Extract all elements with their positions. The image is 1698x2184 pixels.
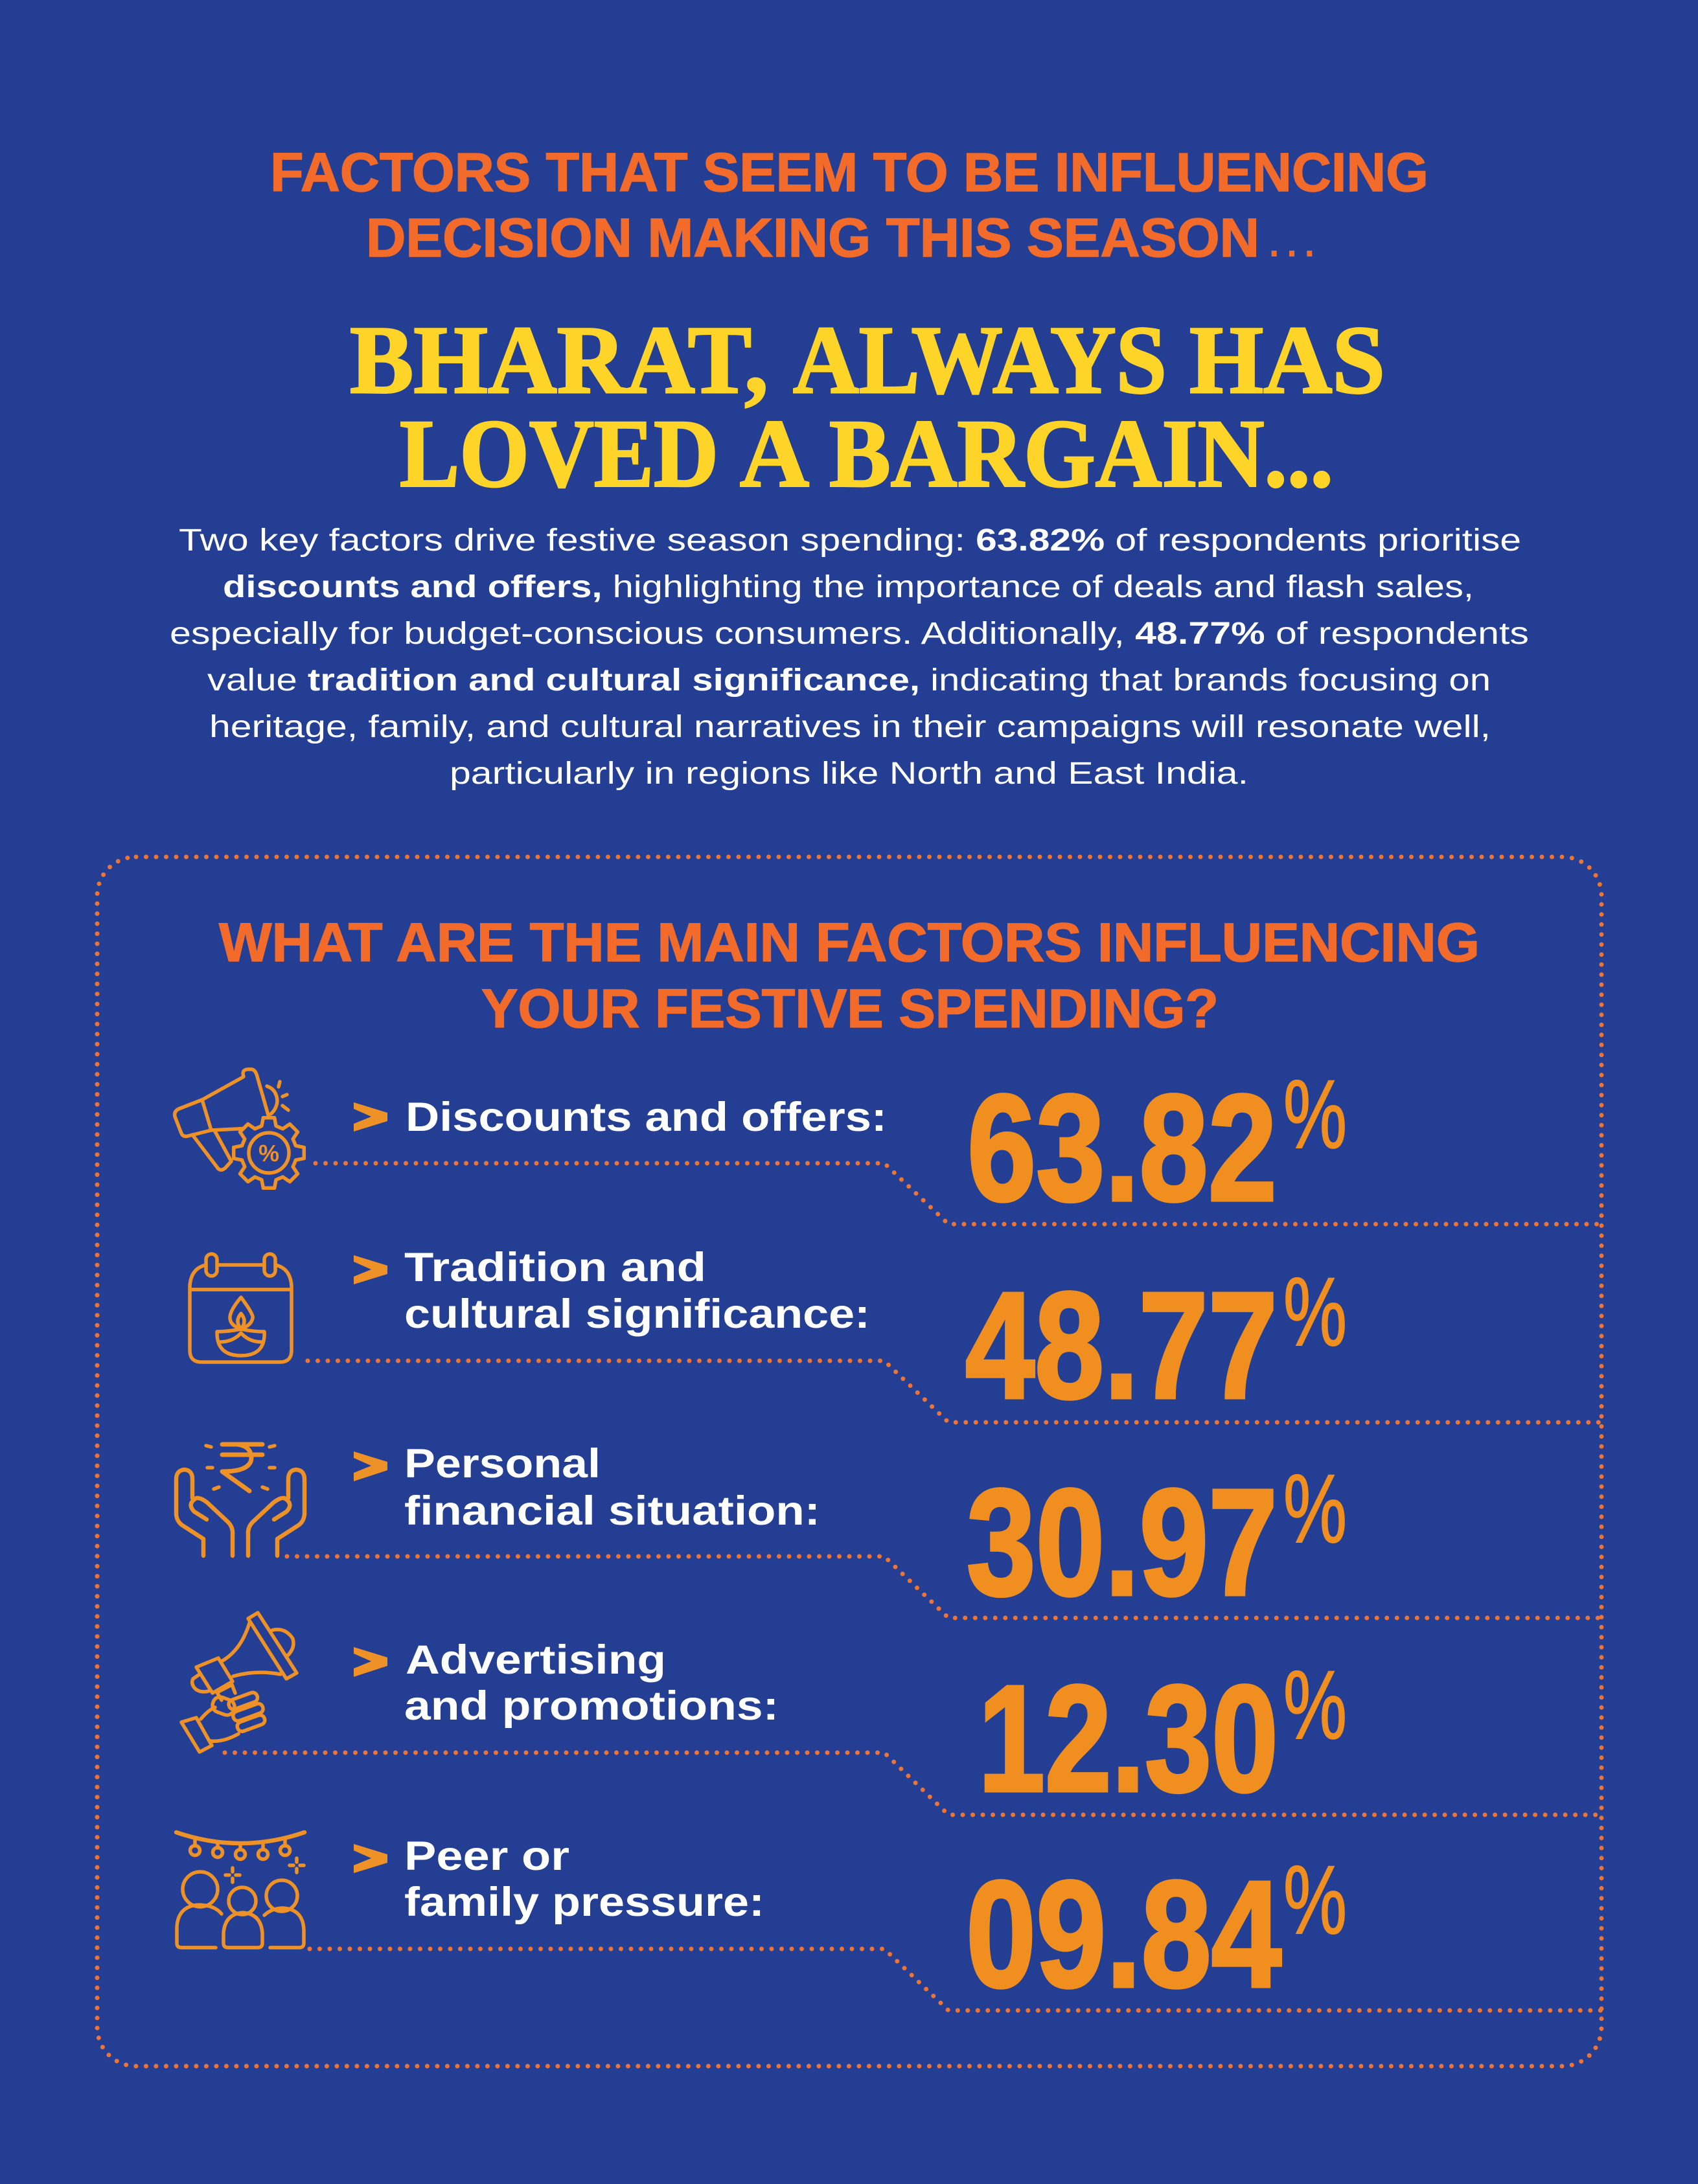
- value: %: [1283, 1454, 1347, 1563]
- connector line: [287, 1556, 1601, 1618]
- panel heading: YOUR FESTIVE SPENDING?: [481, 978, 1219, 1039]
- intro paragraph: particularly in regions like North and East India.: [450, 756, 1248, 791]
- label: [404, 1637, 779, 1729]
- heading: Bharat always has loved a bargain: LOVED: [400, 400, 718, 508]
- arrow: [354, 1647, 387, 1677]
- intro paragraph: Two key factors drive festive season spending: 63.82% of respondents prioritise: [179, 523, 1521, 558]
- label: Peer or: [404, 1834, 569, 1879]
- value: %: [1283, 1650, 1347, 1759]
- intro paragraph: value tradition and cultural significance, indicating that brands focusing on: [207, 663, 1491, 698]
- value: %: [1283, 1257, 1347, 1366]
- connector line: [308, 1361, 1601, 1422]
- icon: calendar with diya: [190, 1254, 292, 1362]
- value: 63.82: [967, 1063, 1277, 1233]
- label: [404, 1834, 764, 1925]
- icon: family under festive garland: [176, 1832, 304, 1948]
- dotted panel border: [97, 857, 1601, 2066]
- label: [404, 1245, 870, 1337]
- intro paragraph: discounts and offers, highlighting the importance of deals and flash sales,: [223, 570, 1474, 604]
- panel heading: WHAT ARE THE MAIN FACTORS INFLUENCING: [219, 912, 1480, 973]
- label: cultural significance:: [404, 1291, 870, 1337]
- label: family pressure:: [404, 1880, 764, 1925]
- arrow: [354, 1451, 387, 1481]
- heading: Bharat always has loved a bargain: BHARAT,: [350, 306, 768, 414]
- value: 48.77: [965, 1260, 1278, 1430]
- row: peer or family pressure: [176, 1832, 1601, 2019]
- intro paragraph: [170, 523, 1529, 791]
- heading: Bharat always has loved a bargain: HAS: [1189, 306, 1385, 414]
- label: Advertising: [406, 1637, 666, 1683]
- label: [404, 1441, 820, 1534]
- value: %: [1283, 1060, 1347, 1168]
- panel heading: [219, 912, 1480, 1039]
- title: factors influencing decision making: FACTORS THAT SEEM TO BE INFLUENCING: [270, 142, 1428, 203]
- label: financial situation:: [404, 1488, 820, 1534]
- intro paragraph: heritage, family, and cultural narratives in their campaigns will resonate well,: [209, 710, 1491, 744]
- intro paragraph: especially for budget-conscious consumers. Additionally, 48.77% of respondents: [170, 617, 1529, 651]
- arrow: [354, 1102, 387, 1132]
- row: personal financial situation: [176, 1441, 1601, 1627]
- heading: Bharat always has loved a bargain: [350, 306, 1385, 508]
- connector line: [316, 1163, 1601, 1224]
- icon: hand holding megaphone: [181, 1613, 297, 1752]
- value: 12.30: [978, 1654, 1278, 1823]
- icon: megaphone with percent gear: [175, 1069, 304, 1188]
- label: Personal: [404, 1441, 601, 1486]
- arrow: [354, 1255, 387, 1284]
- heading: Bharat always has loved a bargain: ALWAYS: [793, 306, 1167, 414]
- connector line: [225, 1753, 1601, 1815]
- label: Tradition and: [404, 1245, 706, 1290]
- heading: Bharat always has loved a bargain: A: [740, 400, 809, 508]
- arrow: [354, 1844, 387, 1873]
- row: advertising and promotions: [181, 1613, 1601, 1823]
- title: factors influencing decision making: ...: [1267, 207, 1317, 268]
- label: and promotions:: [404, 1683, 779, 1729]
- panel: main factors: [97, 857, 1601, 2066]
- icon: hands holding rupee: [176, 1444, 304, 1556]
- title: factors influencing decision making: [270, 142, 1428, 268]
- value: 09.84: [966, 1849, 1281, 2019]
- value: 30.97: [967, 1457, 1278, 1627]
- label: Discounts and offers:: [406, 1095, 887, 1140]
- connector line: [310, 1949, 1601, 2010]
- value: %: [1283, 1845, 1347, 1954]
- row: discounts and offers: [175, 1060, 1601, 1233]
- row: tradition and cultural significance: [190, 1245, 1601, 1430]
- heading: Bharat always has loved a bargain: BARGAIN...: [829, 400, 1333, 508]
- title: factors influencing decision making: DECISION MAKING THIS SEASON: [366, 207, 1259, 268]
- icon: megaphone with percent gear: %: [258, 1140, 279, 1166]
